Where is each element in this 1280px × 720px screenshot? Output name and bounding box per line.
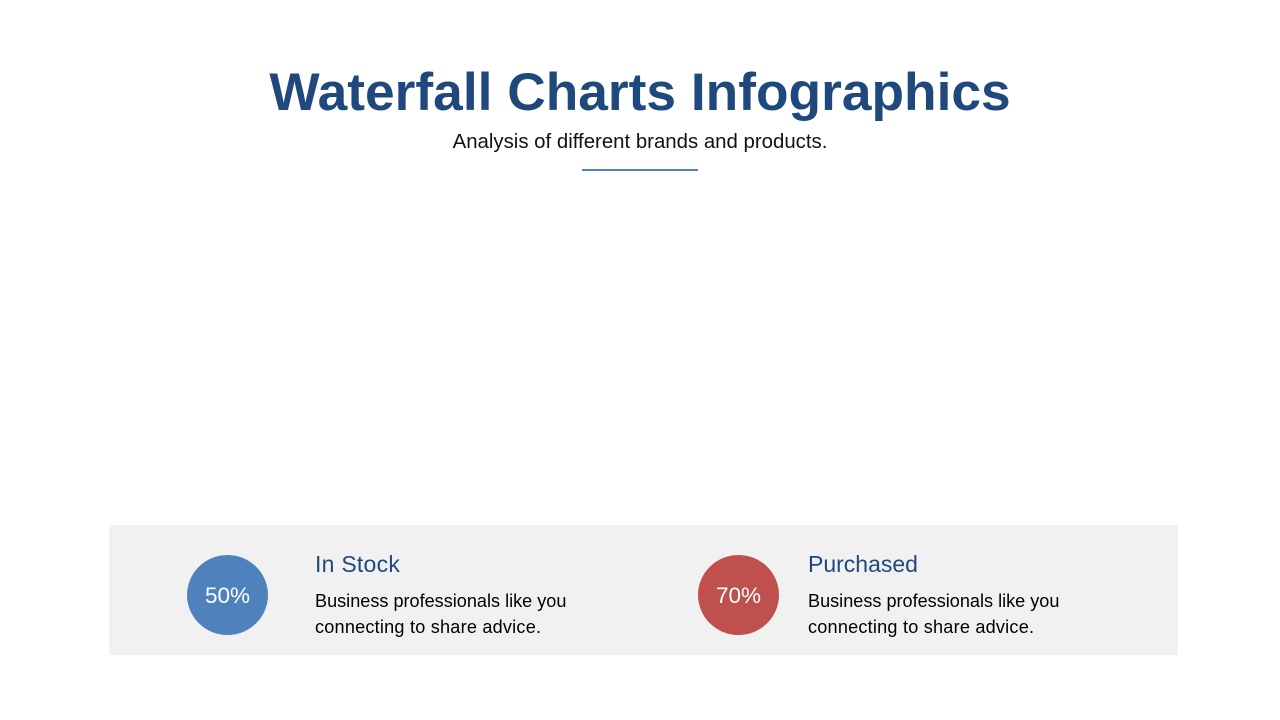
subtitle: Analysis of different brands and products. <box>453 131 827 153</box>
panel: summary band <box>109 525 1178 655</box>
text: purchased description: connecting to share advice. <box>808 617 1034 637</box>
text: in stock description: Business professionals like you <box>315 591 566 611</box>
text: in stock description: connecting to share advice. <box>315 617 541 637</box>
circle: in stock 50%: 50% <box>205 583 250 608</box>
text: purchased description <box>808 591 1059 637</box>
title underline <box>582 169 698 171</box>
title: Waterfall Charts Infographics <box>269 63 1011 122</box>
circle: purchased 70%: 70% <box>716 583 761 608</box>
text: purchased description: Business professionals like you <box>808 591 1059 611</box>
circle: purchased 70% <box>698 555 779 635</box>
circle: in stock 50% <box>187 555 268 635</box>
heading: in stock: In Stock <box>315 551 400 577</box>
heading: purchased: Purchased <box>808 551 918 577</box>
text: in stock description <box>315 591 566 637</box>
